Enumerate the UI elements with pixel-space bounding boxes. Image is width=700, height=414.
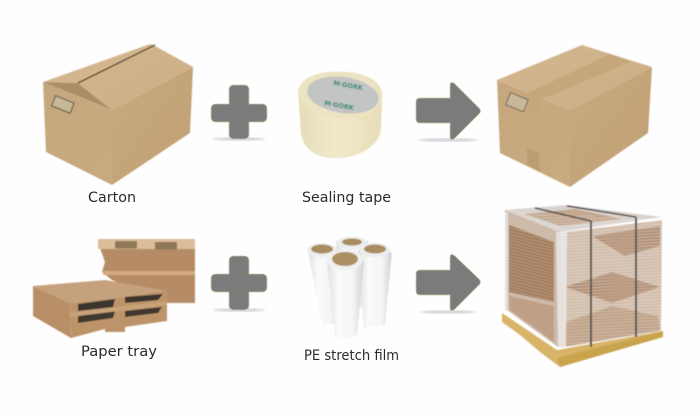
icon: plus bottom: [211, 256, 267, 312]
icon: sealing tape roll: M·GORK: [333, 79, 364, 92]
label: Sealing tape: Sealing tape: [302, 190, 391, 206]
label: PE stretch film: PE stretch film: [304, 348, 399, 364]
icon: sealing tape roll: M·GORK: [324, 99, 355, 112]
icon: PE stretch film rolls: [307, 236, 392, 338]
icon: wrapped pallet: [502, 205, 663, 367]
label: Carton: Carton: [88, 190, 136, 206]
icon: plus top: [211, 85, 267, 141]
pallet base: [502, 313, 663, 367]
wrapped stack: [505, 205, 662, 347]
icon: open carton: [43, 44, 193, 185]
label: Paper tray: Paper tray: [81, 344, 157, 360]
icon: arrow bottom: [416, 254, 480, 314]
icon: paper tray pallets: [33, 239, 195, 338]
icon: sealed carton: [497, 45, 652, 187]
icon: arrow top: [416, 82, 480, 142]
icon: sealing tape roll: [296, 68, 384, 158]
